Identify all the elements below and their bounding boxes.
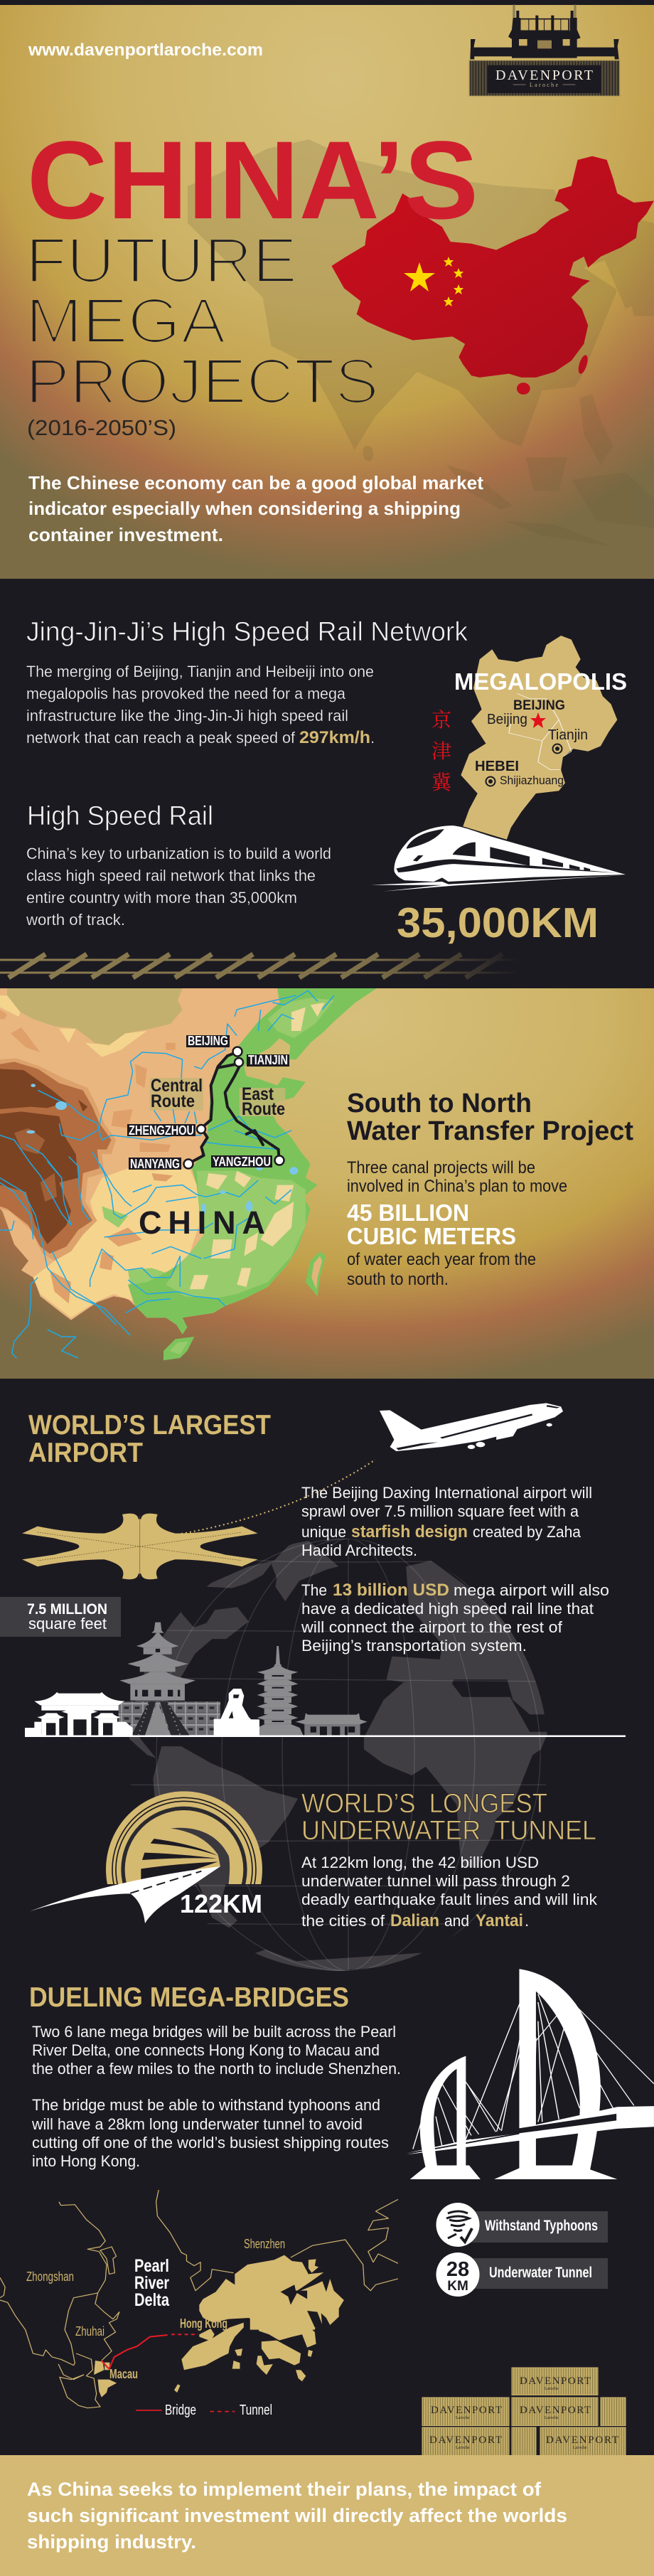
heading: High Speed Rail: High Speed Rail [27, 801, 213, 831]
stat: 122KM: 122KM [180, 1889, 262, 1918]
heading: World's Largest Airport: WORLD’S LARGEST [28, 1410, 271, 1441]
callout: withstand typhoons: Withstand Typhoons [485, 2218, 598, 2234]
callout: 7.5 million square feet: 7.5 MILLION [27, 1601, 107, 1618]
callout: Dalian and Yantai: Yantai [476, 1911, 523, 1930]
text: airport paragraph 2: have a dedicated high speed rail line that [301, 1600, 594, 1618]
text: tunnel paragraph [301, 1854, 598, 1930]
icon: container stack: Laroche [456, 2446, 470, 2450]
title: China's: CHINA’S [27, 119, 478, 242]
callout: underwater tunnel: 28 [446, 2258, 469, 2281]
heading: World's Longest Underwater Tunnel [301, 1789, 596, 1846]
intro text [28, 472, 483, 545]
callout: 7.5 million square feet: square feet [28, 1615, 107, 1632]
divider: skyline baseline [25, 1735, 626, 1737]
intro text: container investment. [28, 524, 223, 545]
text: megalopolis paragraph: The merging of Beijing, Tianjin and Heibeiji into one [26, 663, 374, 680]
map label: China: CHINA [139, 1204, 265, 1241]
icon: rail track [0, 954, 519, 978]
text: megalopolis paragraph: infrastructure like the Jing-Jin-Ji high speed rail [26, 707, 348, 725]
map labels: Shenzhen [244, 2237, 285, 2251]
text: airport paragraph 2 [301, 1581, 609, 1655]
text: megalopolis paragraph: network that can reach a peak speed of [26, 729, 296, 747]
icon: flag stars [404, 257, 463, 306]
chinese characters: 京 [431, 709, 451, 732]
icon: container stack: Laroche [545, 2416, 559, 2420]
stat: 45 billion cubic meters: 45 BILLION [347, 1199, 469, 1226]
icon: dotted flight path [181, 1460, 375, 1534]
icon: tunnel arch [30, 1791, 262, 1947]
callout: Dalian and Yantai [390, 1911, 523, 1930]
map label: Pearl River Delta: River [134, 2273, 169, 2293]
text: canal projects [347, 1158, 567, 1289]
text: urbanization paragraph: entire country with more than 35,000km [26, 889, 297, 907]
map: China in red [331, 156, 654, 395]
route labels: ZHENGZHOU [129, 1123, 194, 1138]
icon: starfish airport [22, 1514, 258, 1579]
panel: footer [0, 2455, 654, 2576]
callout: underwater tunnel: KM [447, 2279, 468, 2294]
text: airport paragraph 1: The Beijing Daxing International airport will [301, 1484, 592, 1502]
text: bridges paragraph 1 [32, 2023, 401, 2078]
heading: World's Longest Underwater Tunnel: WORLD’S LONGEST [301, 1789, 547, 1819]
text: bridges paragraph 1: Two 6 lane mega bridges will be built across the Pearl [32, 2023, 396, 2041]
logo: Davenport Laroche: DAVENPORT [495, 68, 593, 83]
text: airport paragraph 2: The [301, 1581, 327, 1599]
route labels: Central [151, 1076, 203, 1096]
footer background [0, 2455, 654, 2576]
text: tunnel paragraph: deadly earthquake fault lines and will link [301, 1891, 598, 1908]
website url: www.davenportlaroche.com [28, 41, 263, 60]
text: bridges paragraph 2 [31, 2096, 389, 2170]
footer text: shipping industry. [27, 2531, 196, 2553]
text: tunnel paragraph: and [444, 1912, 469, 1930]
illustration: Chinese skyline [25, 1623, 368, 1736]
heading: Jing-Jin-Ji: Jing-Jin-Ji’s High Speed Rail Network [26, 617, 468, 647]
text: canal projects: of water each year from the [347, 1250, 536, 1269]
callout: underwater tunnel [436, 2252, 608, 2297]
chinese characters [431, 709, 452, 794]
water panel background [0, 988, 654, 1379]
text: airport paragraph 2: Beijing’s transportation system. [301, 1637, 527, 1655]
text: canal projects: south to north. [347, 1270, 449, 1289]
logo: Davenport Laroche: Laroche [530, 82, 558, 88]
map: megalopolis: MEGALOPOLIS [454, 668, 627, 695]
heading: World's Longest Underwater Tunnel: UNDERWATER TUNNEL [301, 1816, 596, 1846]
icon: container stack [422, 2368, 626, 2456]
text: airport paragraph 1 [301, 1484, 592, 1559]
icon: container stack: DAVENPORT [520, 2405, 591, 2416]
heading: South to North [347, 1089, 633, 1146]
text: bridges paragraph 2: into Hong Kong. [32, 2152, 140, 2170]
text: tunnel paragraph: . [525, 1912, 529, 1930]
chinese characters: 津 [431, 740, 451, 763]
text: airport paragraph 1: created by Zaha [473, 1523, 581, 1541]
panel: rail [0, 617, 627, 978]
text: tunnel paragraph: underwater tunnel will pass through 2 [301, 1872, 570, 1890]
stat: 45 billion cubic meters [347, 1199, 516, 1249]
route labels: TIANJIN [248, 1053, 288, 1067]
map: megalopolis: Beijing [487, 712, 527, 727]
title: Future Mega Projects [26, 225, 379, 417]
map: megalopolis: BEIJING [513, 698, 565, 713]
text: airport paragraph 1: sprawl over 7.5 million square feet with a [301, 1502, 579, 1520]
icon: container stack: Laroche [573, 2446, 587, 2450]
callout: 7.5 million square feet [0, 1597, 121, 1637]
map: megalopolis [454, 636, 627, 840]
panel: hero [0, 5, 654, 579]
route labels: NANYANG [130, 1157, 180, 1171]
map: terrain of eastern China [0, 988, 377, 1360]
text: urbanization paragraph: worth of track. [26, 911, 125, 929]
callout: 13 billion USD: 13 billion USD [333, 1581, 449, 1600]
text: bridges paragraph 2: will have a 28km long underwater tunnel to avoid [31, 2115, 363, 2133]
legend: Bridge [165, 2403, 196, 2418]
panel: water transfer [0, 988, 654, 1379]
route labels: East [242, 1084, 274, 1104]
map label: Pearl River Delta [134, 2256, 170, 2310]
text: bridges paragraph 2: cutting off one of the world’s busiest shipping routes [32, 2134, 389, 2152]
text: bridges paragraph 1: River Delta, one connects Hong Kong to Macau and [32, 2041, 380, 2059]
text: tunnel paragraph: At 122km long, the 42 billion USD [301, 1854, 539, 1871]
text: urbanization paragraph: class high speed rail network that links the [26, 867, 316, 885]
panel: bridges [0, 1969, 654, 2456]
text: airport paragraph 1: Hadid Architects. [301, 1541, 417, 1559]
map label: Pearl River Delta: Pearl [134, 2256, 169, 2276]
map label: Pearl River Delta: Delta [134, 2290, 170, 2310]
heading: Dueling Mega-Bridges: DUELING MEGA-BRIDGES [29, 1982, 349, 2013]
icon: bridge [407, 1969, 654, 2179]
map labels [26, 2237, 285, 2381]
legend [165, 2403, 272, 2418]
hero gold background [0, 5, 654, 579]
text: megalopolis paragraph [26, 663, 375, 747]
text: bridges paragraph 1: the other a few miles to the north to include Shenzhen. [32, 2060, 401, 2078]
heading: South to North: South to North [347, 1089, 532, 1118]
callout: Dalian and Yantai: Dalian [390, 1911, 439, 1930]
text: airport paragraph 2: will connect the airport to the rest of [301, 1618, 563, 1636]
text: canal projects: involved in China’s plan to move [347, 1177, 567, 1196]
title: Future Mega Projects: FUTURE [26, 225, 297, 296]
title: Future Mega Projects: PROJECTS [26, 346, 379, 417]
text: urbanization paragraph: China’s key to urbanization is to build a world [26, 845, 331, 862]
map: megalopolis: Shijiazhuang [500, 774, 564, 787]
text: tunnel paragraph: the cities of [301, 1912, 385, 1930]
chart: canal routes [188, 1052, 279, 1164]
intro text: The Chinese economy can be a good global market [28, 472, 483, 493]
map labels: Hong Kong [180, 2316, 227, 2331]
route labels: BEIJING [188, 1034, 228, 1048]
callout: withstand typhoons [436, 2203, 608, 2247]
icon: container stack: DAVENPORT [429, 2435, 502, 2446]
heading: South to North: Water Transfer Project [347, 1116, 633, 1146]
icon: container stack: DAVENPORT [546, 2435, 618, 2446]
route labels [127, 1034, 289, 1171]
chinese characters: 冀 [431, 771, 452, 794]
legend: Tunnel [240, 2403, 272, 2418]
route labels: YANGZHOU [213, 1155, 271, 1169]
intro text: indicator especially when considering a shipping [28, 498, 461, 519]
callout: starfish design: starfish design [351, 1522, 468, 1541]
route labels: Route [242, 1099, 285, 1119]
text: airport paragraph 1: unique [301, 1523, 346, 1541]
map: Pearl River Delta [0, 2190, 398, 2412]
footer text: As China seeks to implement their plans, the impact of [27, 2479, 542, 2500]
callout: underwater tunnel: Underwater Tunnel [489, 2265, 592, 2281]
stat: 35,000KM: 35,000KM [397, 899, 599, 946]
logo: Davenport Laroche [469, 5, 620, 96]
text: canal projects: Three canal projects will be [347, 1158, 535, 1177]
date range: (2016-2050’S) [27, 415, 176, 440]
panel: tunnel [30, 1791, 597, 1926]
map labels: Zhongshan [26, 2270, 74, 2284]
heading: World's Largest Airport [28, 1410, 271, 1468]
text: megalopolis paragraph: megalopolis has provoked the need for a mega [26, 685, 346, 702]
icon: container stack: Laroche [545, 2387, 559, 2391]
title: Future Mega Projects: MEGA [26, 286, 226, 357]
icon: container stack: Laroche [456, 2416, 470, 2420]
icon: bullet train [371, 825, 626, 892]
map: megalopolis: Tianjin [548, 727, 588, 743]
text: megalopolis paragraph: . [370, 729, 375, 747]
text: urbanization paragraph [26, 845, 331, 929]
map labels: Zhuhai [75, 2324, 104, 2339]
icon: container stack: DAVENPORT [431, 2405, 502, 2416]
text: airport paragraph 2: mega airport will also [454, 1581, 609, 1599]
footer text [27, 2479, 567, 2553]
map: ghost Asia [188, 139, 654, 547]
text: bridges paragraph 2: The bridge must be able to withstand typhoons and [32, 2096, 380, 2114]
heading: World's Largest Airport: AIRPORT [28, 1438, 143, 1468]
footer text: such significant investment will directly affect the worlds [27, 2505, 567, 2526]
stat: 45 billion cubic meters: CUBIC METERS [347, 1223, 516, 1249]
icon: container stack: DAVENPORT [520, 2375, 591, 2387]
callout: 297km/h: 297km/h [299, 728, 370, 747]
panel: airport [0, 1403, 626, 1737]
map: megalopolis: HEBEI [475, 759, 519, 774]
route labels: Route [151, 1091, 195, 1111]
illustration: globe [107, 1537, 562, 1972]
map labels: Macau [109, 2367, 138, 2381]
icon: airplane [380, 1403, 563, 1451]
